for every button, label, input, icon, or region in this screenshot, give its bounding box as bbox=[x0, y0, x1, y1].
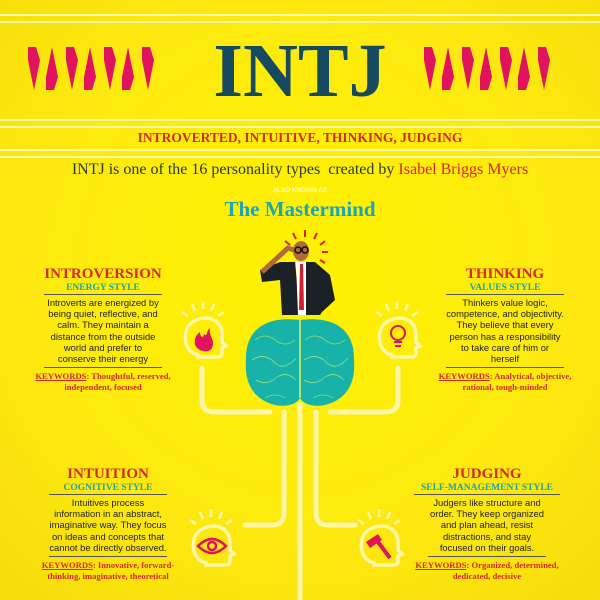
nickname: The Mastermind bbox=[224, 197, 376, 221]
panel: introversion: INTROVERSION bbox=[44, 266, 162, 282]
icon: eye head bbox=[189, 509, 237, 567]
panel: judging bbox=[414, 466, 560, 581]
panel: intuition: Intuitives process information in an abstract, imaginative way. They focus on ideas and concepts that cannot be directly observed. bbox=[49, 497, 167, 553]
panel: judging: KEYWORDS: Organized, determined, dedicated, decisive bbox=[415, 560, 559, 581]
intro line: INTJ is one of the 16 personality types created by Isabel Briggs Myers bbox=[72, 161, 528, 178]
icon: fire head bbox=[181, 301, 229, 359]
diamonds right bbox=[424, 47, 550, 90]
panel: thinking: VALUES STYLE bbox=[470, 283, 540, 293]
person bbox=[260, 230, 335, 315]
panel: intuition bbox=[42, 466, 174, 581]
panel: introversion: ENERGY STYLE bbox=[66, 283, 140, 293]
title: INTJ bbox=[213, 29, 387, 113]
brain bbox=[246, 319, 354, 406]
panel: thinking bbox=[438, 266, 572, 392]
panel: judging: JUDGING bbox=[452, 466, 522, 482]
subtitle: INTROVERTED, INTUITIVE, THINKING, JUDGING bbox=[138, 130, 462, 145]
icon: bulb head bbox=[375, 301, 423, 359]
panel: intuition: KEYWORDS: Innovative, forward-thinking, imaginative, theoretical bbox=[42, 560, 174, 581]
panel: introversion bbox=[35, 266, 171, 392]
diamonds left bbox=[28, 47, 154, 90]
icon: hammer head bbox=[357, 509, 405, 567]
pipes bbox=[202, 368, 398, 600]
panel: thinking: Thinkers value logic, competence, and objectivity. They believe that every person has a responsibility to take care of him or herself bbox=[446, 297, 564, 364]
panel: intuition: INTUITION bbox=[67, 466, 149, 482]
panel: judging: SELF-MANAGEMENT STYLE bbox=[421, 483, 553, 493]
also known as: ALSO KNOWN AS bbox=[273, 187, 327, 194]
panel: thinking: THINKING bbox=[466, 266, 544, 282]
panel: thinking: KEYWORDS: Analytical, objective, rational, tough-minded bbox=[439, 371, 571, 392]
panel: intuition: COGNITIVE STYLE bbox=[64, 483, 152, 493]
panel: judging: Judgers like structure and order. They keep organized and plan ahead, resist distractions, and stay focused on their goals. bbox=[430, 497, 544, 553]
panel: introversion: KEYWORDS: Thoughtful, reserved, independent, focused bbox=[35, 371, 171, 392]
panel: introversion: Introverts are energized by being quiet, reflective, and calm. They maintain a distance from the outside world and prefer to conserve their energy bbox=[47, 297, 159, 364]
